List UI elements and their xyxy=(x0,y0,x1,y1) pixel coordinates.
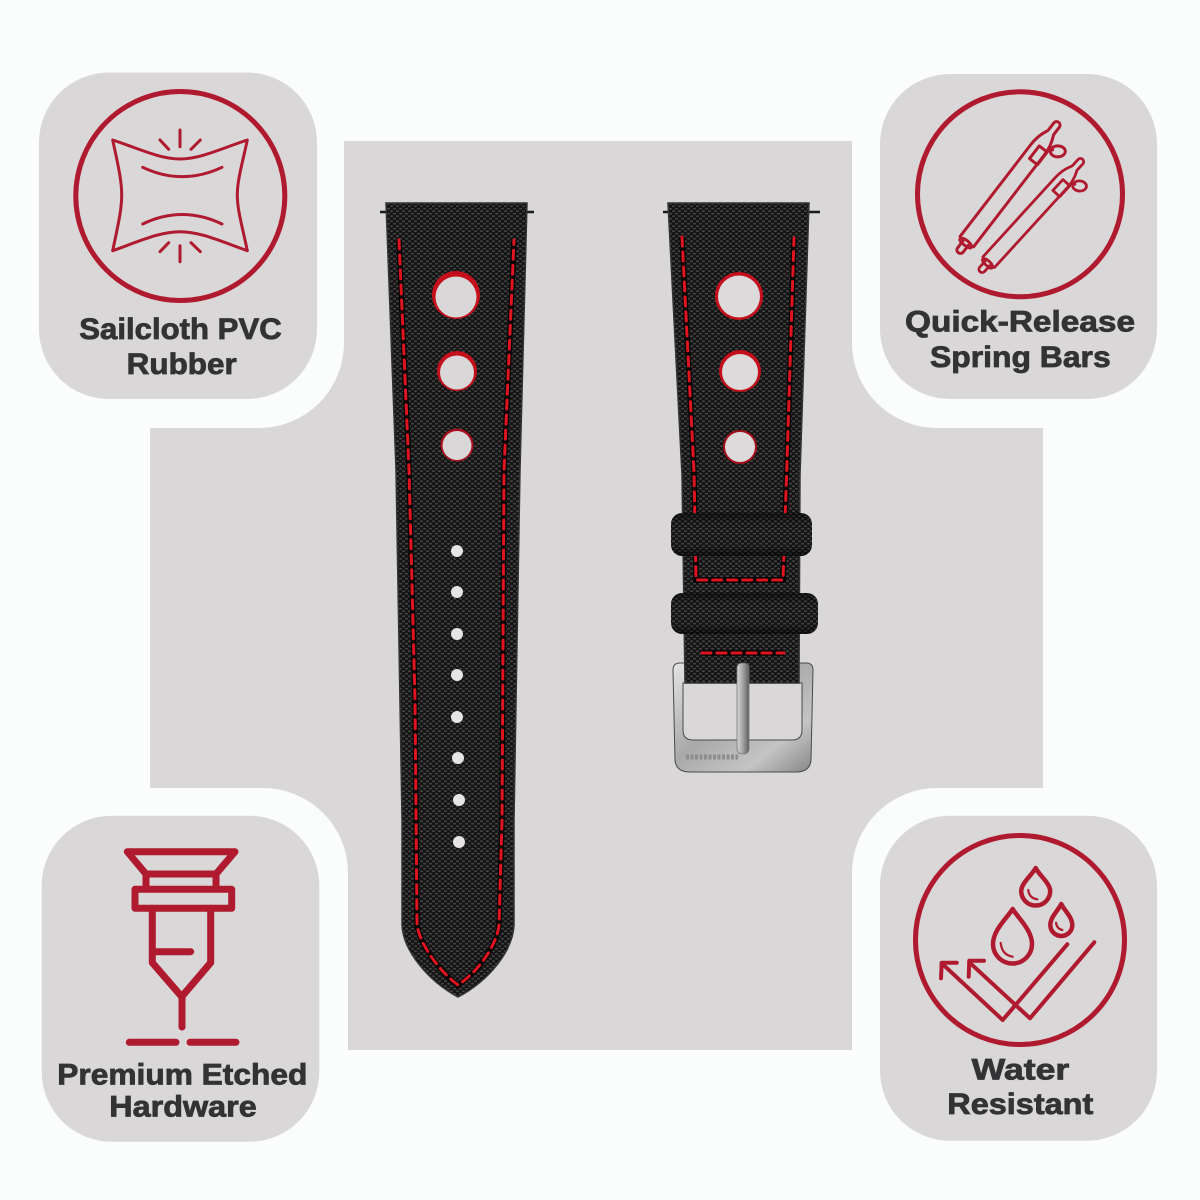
label: Sailcloth PVC xyxy=(79,313,282,346)
upper keeper loop xyxy=(671,513,812,556)
buckle tongue xyxy=(737,663,749,754)
icon: etching tool xyxy=(127,852,236,1042)
second spring bar xyxy=(974,154,1101,288)
strap stitching xyxy=(682,237,794,653)
buckle engraving xyxy=(686,754,738,760)
short watch strap with buckle xyxy=(663,203,820,772)
strap stitching xyxy=(399,240,514,985)
icon: stretching pillow xyxy=(76,92,285,300)
background panel xyxy=(150,141,1043,1050)
label: Quick-Release xyxy=(905,306,1135,339)
card: Quick-Release Spring Bars xyxy=(880,74,1157,399)
icon: water repelling drops xyxy=(916,836,1124,1044)
strap body xyxy=(386,203,527,997)
card: Sailcloth PVC Rubber xyxy=(39,72,317,399)
label: Hardware xyxy=(109,1091,257,1124)
label: Resistant xyxy=(947,1088,1093,1121)
label: Premium Etched xyxy=(57,1058,307,1091)
spring bar tips xyxy=(663,211,820,213)
long watch strap xyxy=(380,203,534,997)
icon: spring bars xyxy=(918,92,1122,297)
large strap holes xyxy=(432,271,480,462)
lower keeper loop xyxy=(671,593,818,634)
buckle frame xyxy=(673,663,813,772)
large strap holes xyxy=(715,272,763,464)
spring bar tips xyxy=(380,211,534,213)
strap body xyxy=(668,203,809,683)
first spring bar xyxy=(952,117,1080,269)
card: Premium Etched Hardware xyxy=(42,816,319,1142)
label: Water xyxy=(972,1053,1070,1086)
label: Spring Bars xyxy=(930,341,1111,374)
card: Water Resistant xyxy=(880,816,1157,1141)
small adjustment holes xyxy=(451,545,465,848)
label: Rubber xyxy=(127,348,237,381)
